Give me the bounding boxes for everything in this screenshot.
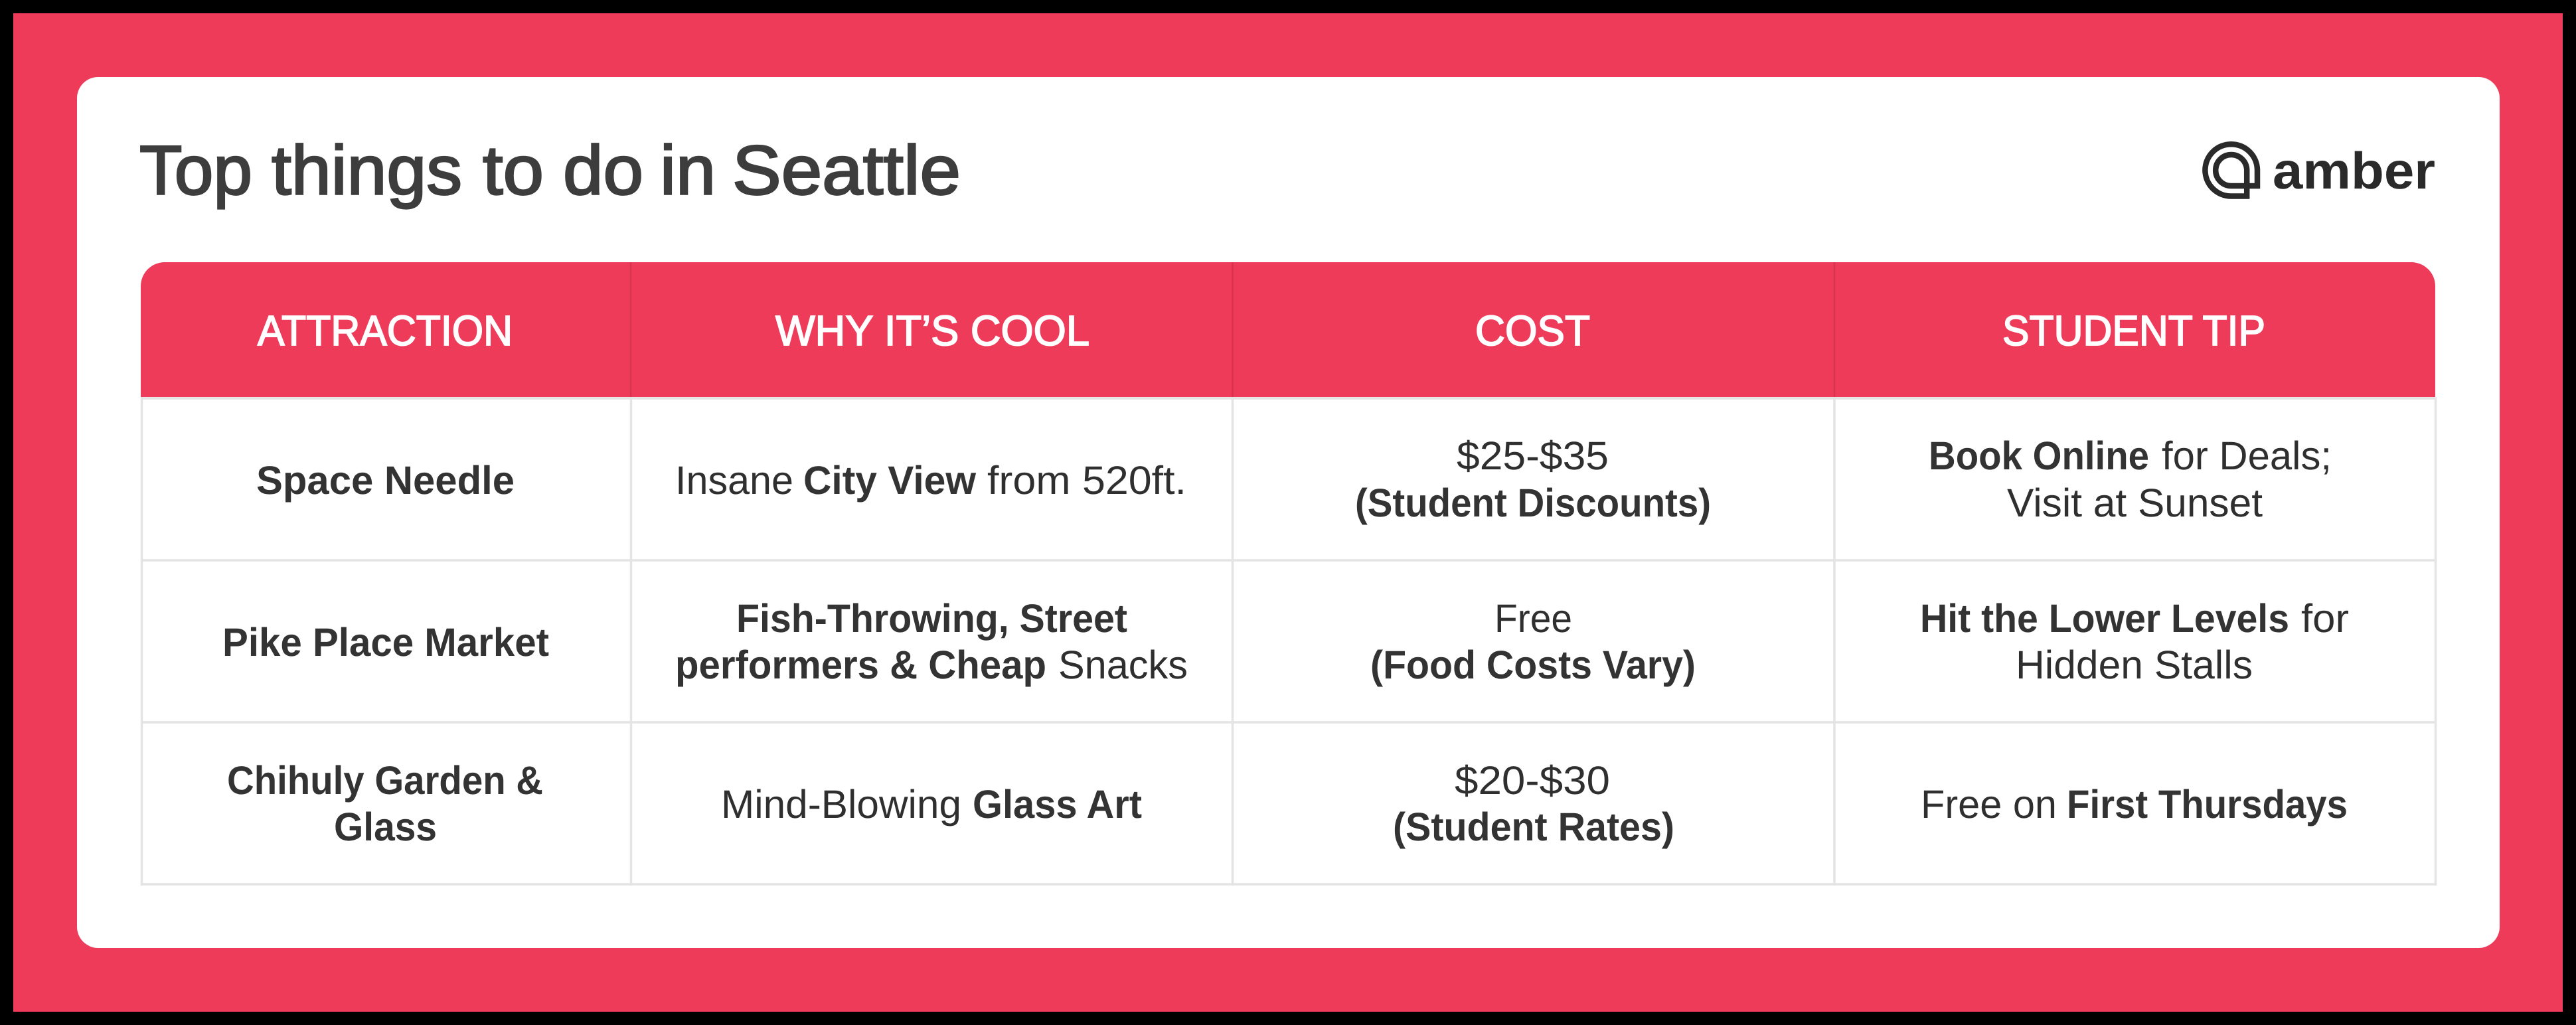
cell: cost: (Student Rates) — [1393, 805, 1674, 849]
icon: amber speech-bubble mark — [2205, 144, 2257, 199]
cell: cost: $25-$35 — [1457, 434, 1609, 478]
row: Space Needle — [256, 434, 2332, 525]
cell: cost — [1370, 596, 1696, 687]
cell: cost — [1393, 758, 1674, 849]
cell: student tip — [1921, 782, 2348, 827]
cell: student tip: for — [2301, 596, 2349, 641]
cell: cost: Free — [1494, 596, 1572, 641]
cell: why it's cool — [721, 782, 1142, 827]
cell: cost: (Student Discounts) — [1355, 481, 1711, 525]
title: to — [483, 131, 544, 210]
logo wordmark: amber — [2273, 141, 2435, 200]
cell: attraction: Chihuly Garden & — [227, 758, 543, 803]
title: things — [272, 131, 462, 210]
logo: amber — [2205, 141, 2435, 200]
title — [139, 131, 961, 210]
header: attraction: ATTRACTION — [258, 307, 513, 355]
cell: why it's cool: Mind-Blowing — [721, 782, 961, 827]
header: cost: COST — [1475, 307, 1590, 355]
cell: attraction: Pike Place Market — [222, 620, 549, 665]
cell: student tip: Book Online — [1929, 434, 2149, 478]
title: Top — [139, 131, 252, 210]
cell: student tip: Hidden Stalls — [2016, 643, 2253, 687]
cell: cost — [1355, 434, 1711, 525]
cell: why it's cool: City View — [803, 458, 976, 503]
cell: student tip — [1920, 596, 2349, 687]
cell: why it's cool — [675, 458, 1186, 503]
table grid lines — [141, 397, 2437, 886]
cell: attraction — [227, 758, 543, 849]
row: Chihuly Garden & Glass — [227, 758, 2348, 849]
cell: attraction: Glass — [334, 805, 437, 849]
cell: student tip: Visit at Sunset — [2007, 481, 2263, 525]
title: in — [660, 131, 716, 210]
table — [141, 262, 2437, 886]
cell: student tip: Hit the Lower Levels — [1920, 596, 2289, 641]
cell: student tip — [1929, 434, 2332, 525]
row: Pike Place Market — [222, 596, 2349, 687]
cell: why it's cool — [675, 596, 1188, 687]
title: Seattle — [732, 131, 961, 210]
cell: student tip: First Thursdays — [2067, 782, 2348, 827]
cell: why it's cool: from 520ft. — [987, 458, 1186, 503]
cell: why it's cool: Fish-Throwing, Street — [736, 596, 1127, 641]
cell: attraction: Space Needle — [256, 458, 515, 503]
cell: cost: $20-$30 — [1455, 758, 1610, 803]
cell: student tip: for Deals; — [2162, 434, 2332, 478]
cell: why it's cool: performers & Cheap — [675, 643, 1046, 687]
cell: why it's cool: Snacks — [1058, 643, 1188, 687]
cell: why it's cool: Glass Art — [973, 782, 1142, 827]
cell: cost: (Food Costs Vary) — [1370, 643, 1696, 687]
header background — [141, 262, 2435, 397]
header: student tip: STUDENT TIP — [2002, 307, 2265, 355]
header column dividers — [631, 262, 1834, 397]
cell: why it's cool: Insane — [675, 458, 793, 503]
header: why it's cool: WHY IT’S COOL — [775, 307, 1089, 355]
cell: student tip: Free on — [1921, 782, 2057, 827]
white card — [77, 77, 2500, 948]
table header row — [141, 262, 2435, 397]
title: do — [563, 131, 643, 210]
